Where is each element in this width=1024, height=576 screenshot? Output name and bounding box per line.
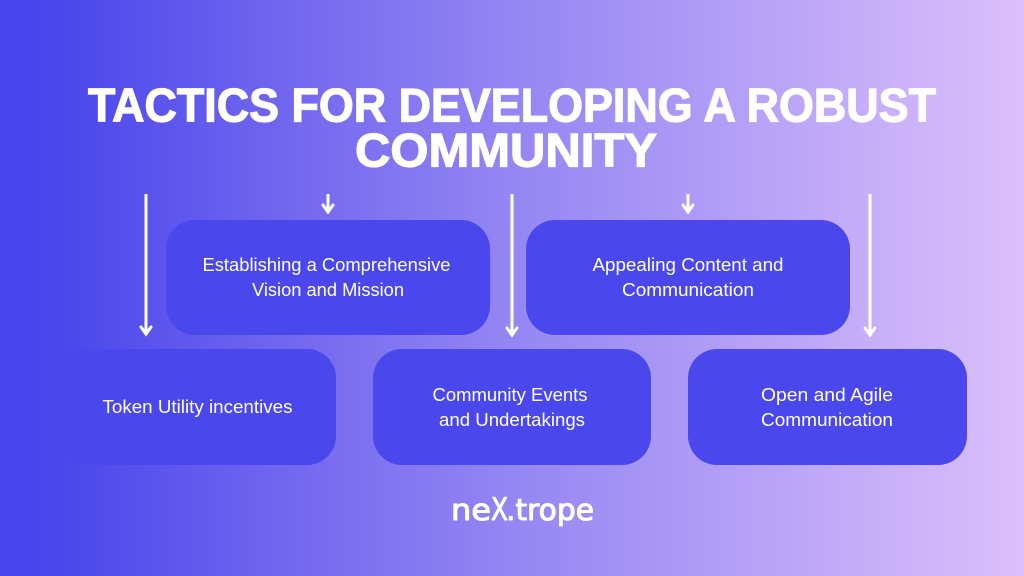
- logo: nextrope: ne: [451, 493, 491, 527]
- title: COMMUNITY: [355, 124, 657, 176]
- panel: vision and mission: [166, 220, 490, 335]
- title: [88, 78, 936, 176]
- arrow: short left: [323, 194, 333, 212]
- logo: nextrope: .trope: [506, 493, 594, 527]
- logo: nextrope: [451, 492, 594, 528]
- panel: open communication: Communication: [761, 410, 893, 430]
- arrow: long centre: [507, 194, 517, 335]
- arrow: long right: [865, 194, 875, 335]
- panel: appealing content: [526, 220, 850, 335]
- panel: appealing content: Communication: [622, 280, 754, 300]
- panel: community events: and Undertakings: [439, 410, 585, 430]
- panel: vision and mission: Vision and Mission: [252, 280, 404, 300]
- panel: community events: [373, 349, 651, 465]
- title: TACTICS FOR DEVELOPING A ROBUST: [88, 78, 936, 132]
- arrow: short right: [683, 194, 693, 212]
- panel: token utility: Token Utility incentives: [102, 397, 292, 417]
- logo: nextrope: X: [491, 492, 508, 528]
- panel: community events: Community Events: [432, 385, 588, 405]
- panel: token utility: [58, 349, 336, 465]
- panel: appealing content: Appealing Content and: [592, 255, 784, 275]
- panel: vision and mission: Establishing a Comprehensive: [202, 255, 450, 275]
- panel: open communication: [688, 349, 967, 465]
- arrow: long left: [141, 194, 151, 334]
- panel: open communication: Open and Agile: [761, 385, 893, 405]
